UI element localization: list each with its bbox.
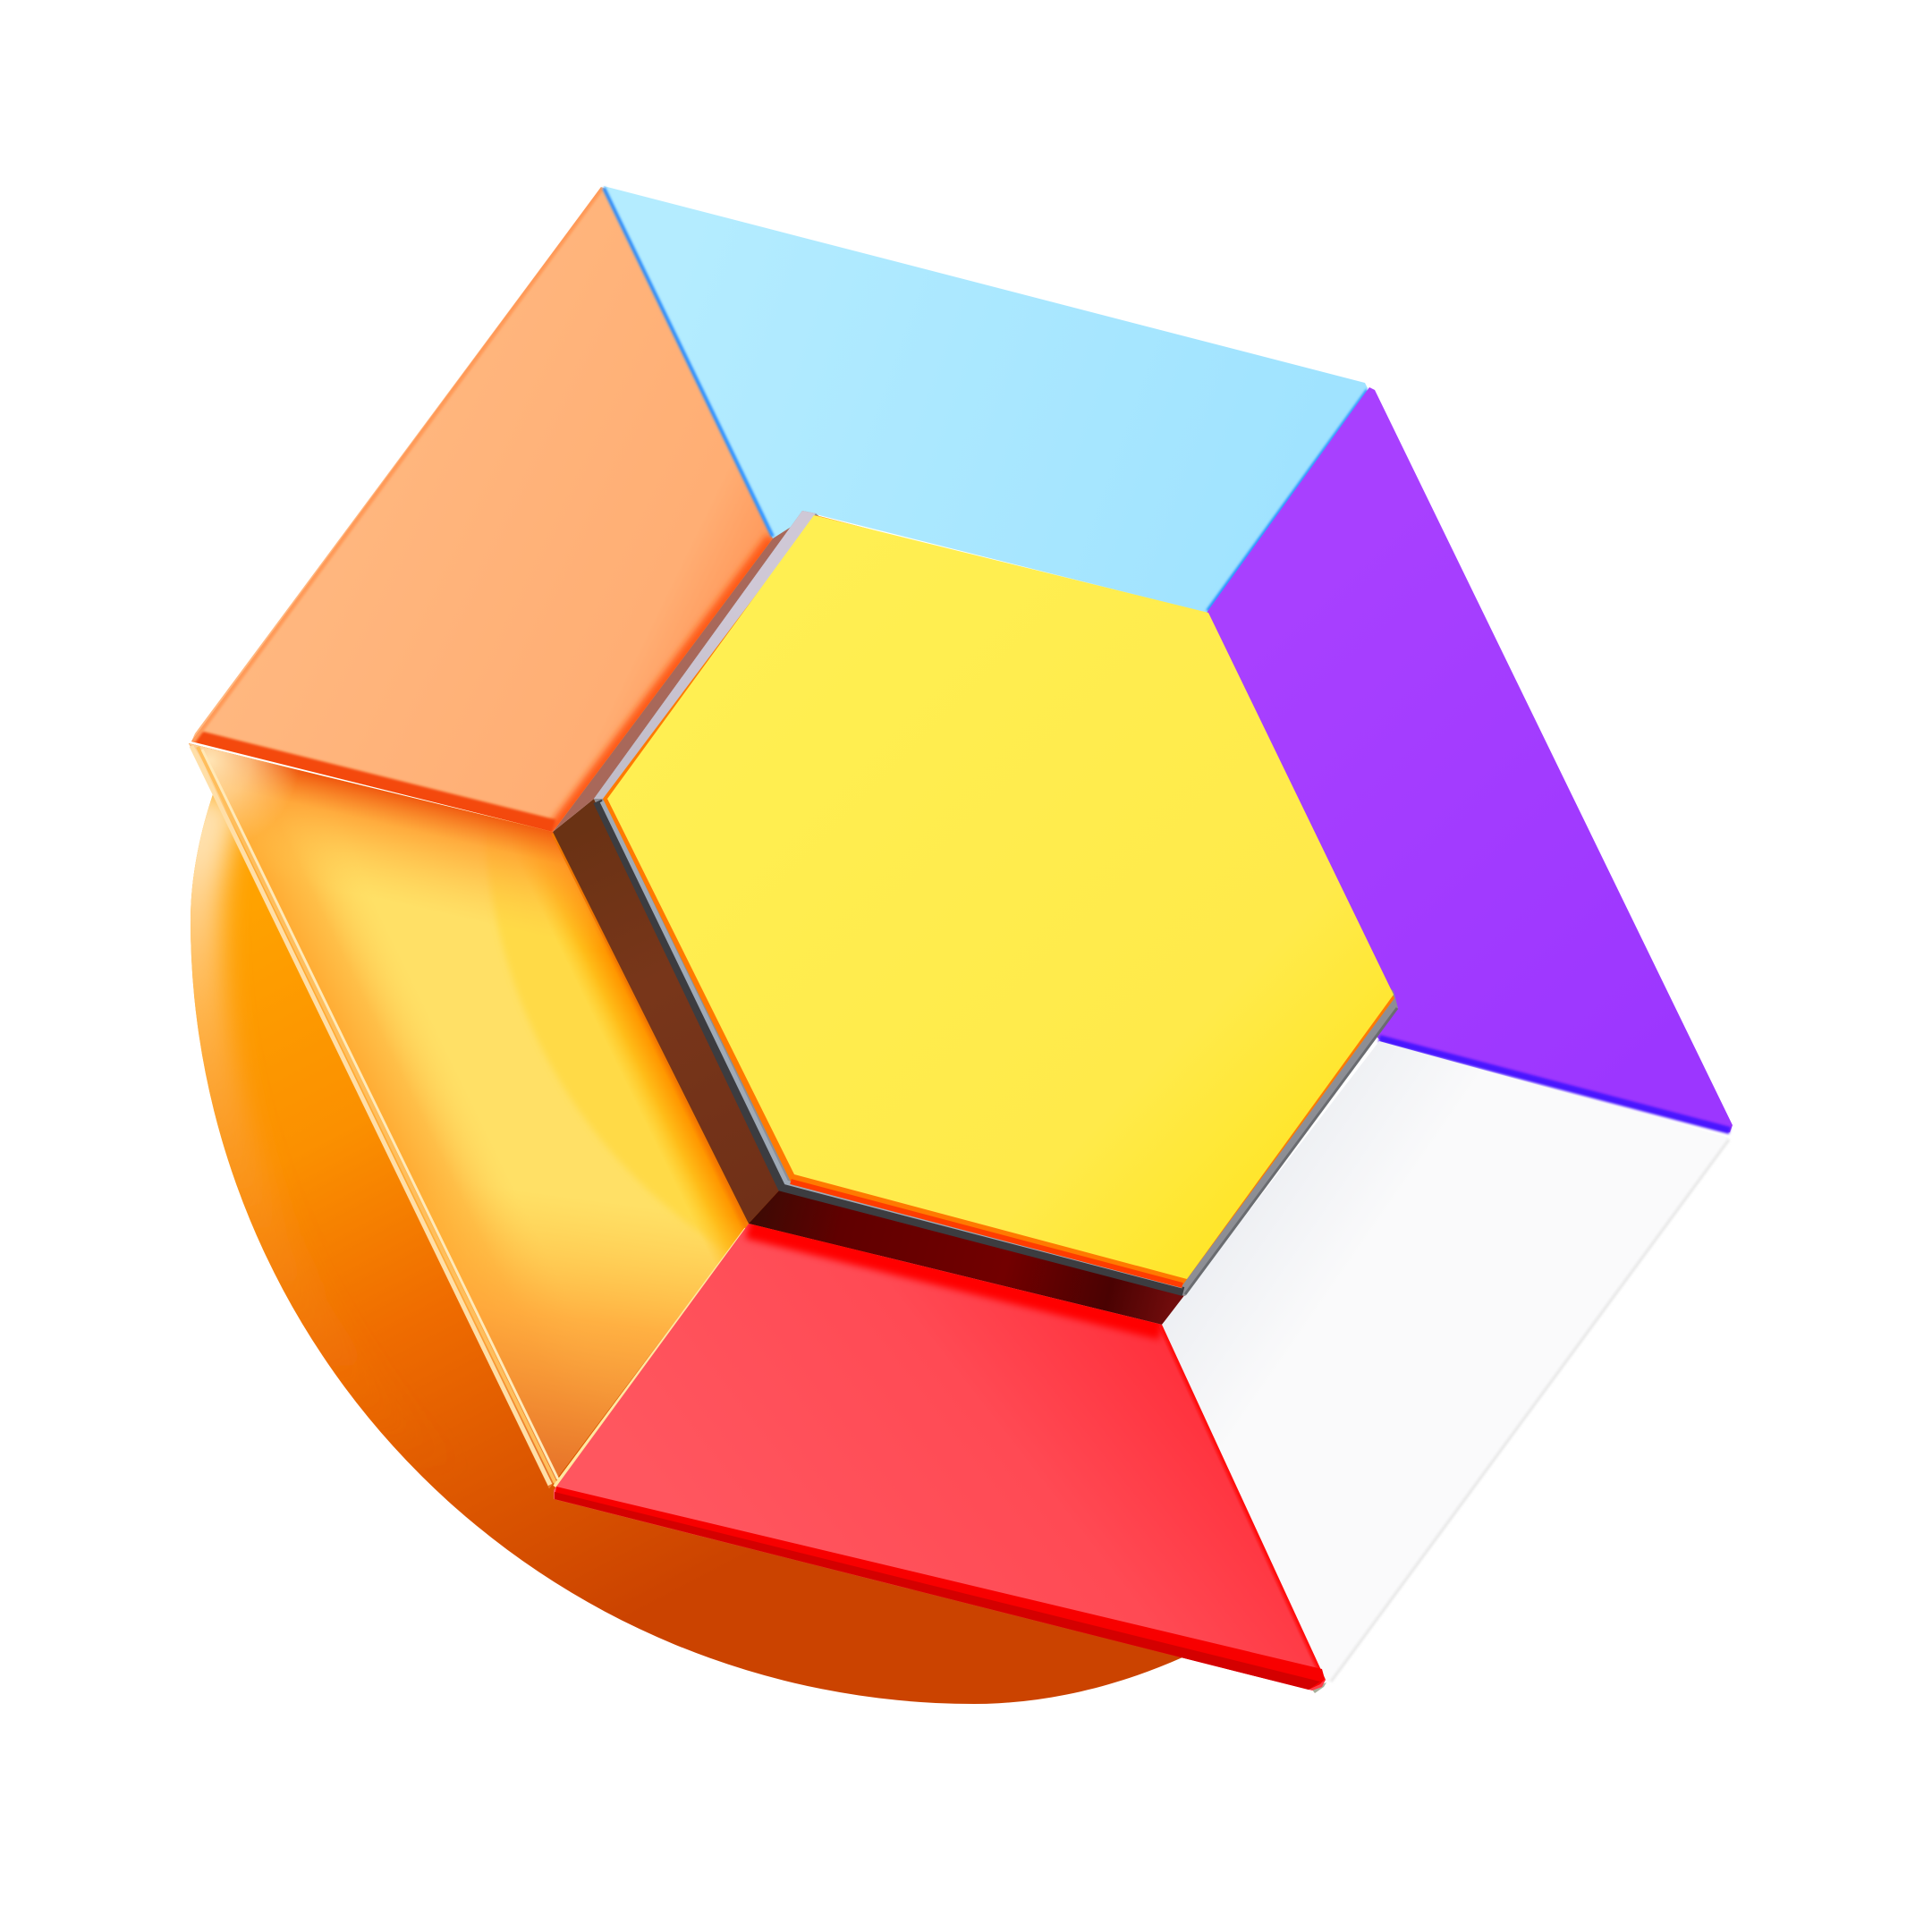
panel: yellow hexagon cap: [603, 515, 1394, 1285]
inner wall: maroon bottom: [749, 1191, 1185, 1325]
panel: peach orange facet: [191, 187, 773, 832]
panel: red facet: [554, 1224, 1326, 1690]
illustration: 3D hexagonal gem on orange sphere: [189, 186, 1733, 1704]
panel: purple facet: [1207, 387, 1733, 1132]
panel: white facet: [1162, 1041, 1729, 1693]
inner wall: brown left: [553, 799, 779, 1224]
inner wall: upper left sliver: [553, 511, 802, 832]
orange sphere: [191, 794, 1182, 1704]
panel: glass amber facet: [189, 743, 749, 1488]
rim: grey bevel around cap: [594, 511, 1398, 1296]
panel: light blue facet: [604, 186, 1368, 613]
